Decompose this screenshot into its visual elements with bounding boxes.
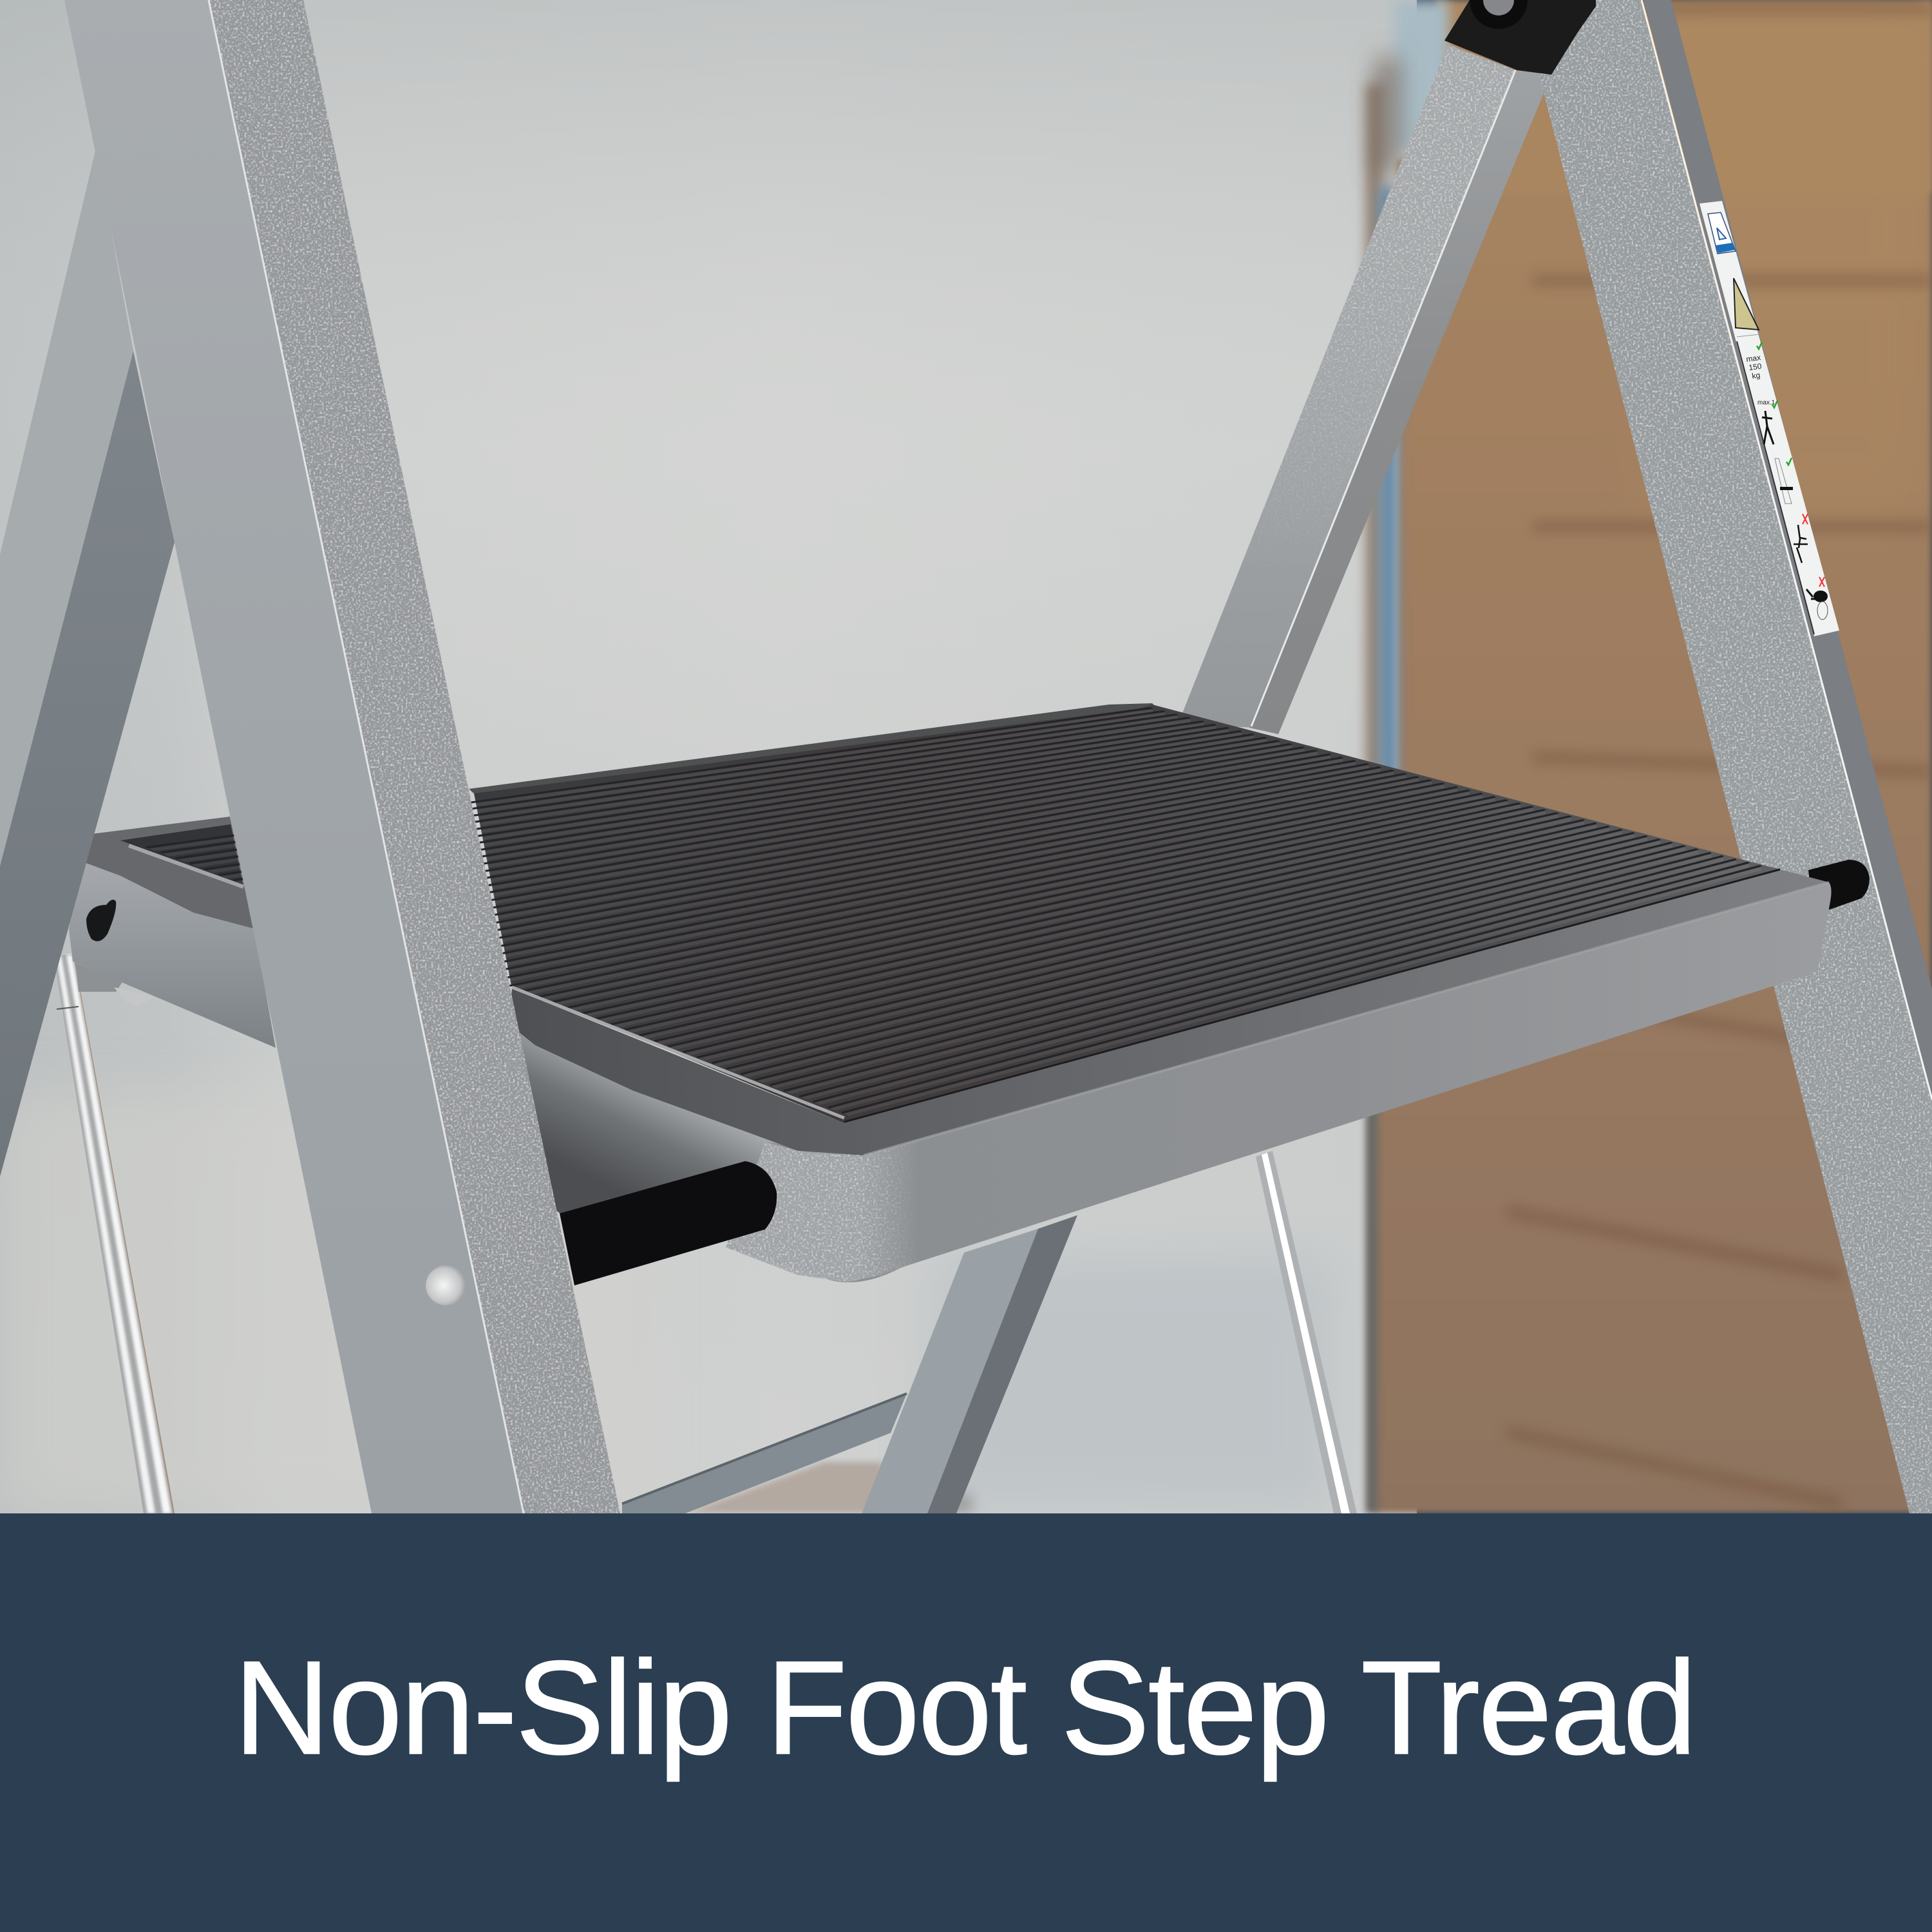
- right front leg: [1520, 0, 1932, 1513]
- left rear leg: [0, 148, 175, 1177]
- slot hole: [86, 900, 116, 942]
- sticker: maximum load 150 kg: [1737, 334, 1763, 381]
- sticker: maximum load 150 kg: kg: [1751, 370, 1761, 381]
- mat edge: front: [844, 869, 1780, 1122]
- back rim: [469, 703, 1159, 796]
- rivet: [426, 1265, 466, 1305]
- sticker: maximum load 150 kg: max: [1745, 353, 1761, 364]
- sticker: step position: [1775, 458, 1793, 504]
- sticker: warning triangle: [1734, 278, 1759, 330]
- stepladder: [0, 0, 1932, 1513]
- right rear leg: [1178, 44, 1551, 734]
- sticker: no reaching: [1806, 577, 1828, 620]
- step front face: [726, 882, 1832, 1282]
- chrome support rod: left: [53, 955, 175, 1513]
- right rod end cap: [1808, 860, 1870, 911]
- black hinge: [1444, 0, 1596, 75]
- hinge bracket: [75, 963, 122, 992]
- rear cross bar: [622, 1394, 907, 1513]
- sticker: maximum load 150 kg: 150: [1748, 361, 1763, 372]
- rear lower brace: [862, 1215, 1077, 1513]
- mat metal edge: left: [512, 987, 844, 1118]
- rubber mat: [474, 705, 1780, 1123]
- cardboard: [1375, 0, 1932, 1513]
- speckled front corner: [726, 1141, 918, 1282]
- sticker: no climbing: [1794, 514, 1808, 563]
- non-slip foot step tread: [146, 703, 1832, 1282]
- black crossbar rod: [560, 1161, 777, 1285]
- mat ribs: [146, 708, 1761, 1116]
- left beam of step: [69, 817, 276, 1048]
- safety sticker strip: [1700, 201, 1839, 636]
- rim fold highlight: [864, 882, 1829, 1155]
- sticker: certification badge: [1708, 213, 1736, 254]
- underside of step: [502, 1005, 798, 1224]
- front rim band: [509, 869, 1829, 1155]
- chrome support rod: right: [1256, 1151, 1357, 1513]
- caption text: Non-Slip Foot Step Tread: [234, 1633, 1697, 1782]
- sticker: one person maximum: [1757, 399, 1777, 444]
- caption banner: [0, 1513, 1932, 1932]
- hinge clip: [114, 987, 156, 1006]
- photo background: wall and cardboard boxes: [0, 0, 1932, 1513]
- left mat section: [120, 824, 243, 887]
- left front leg: [64, 0, 620, 1513]
- sticker: one person maximum: max.1: [1757, 399, 1776, 406]
